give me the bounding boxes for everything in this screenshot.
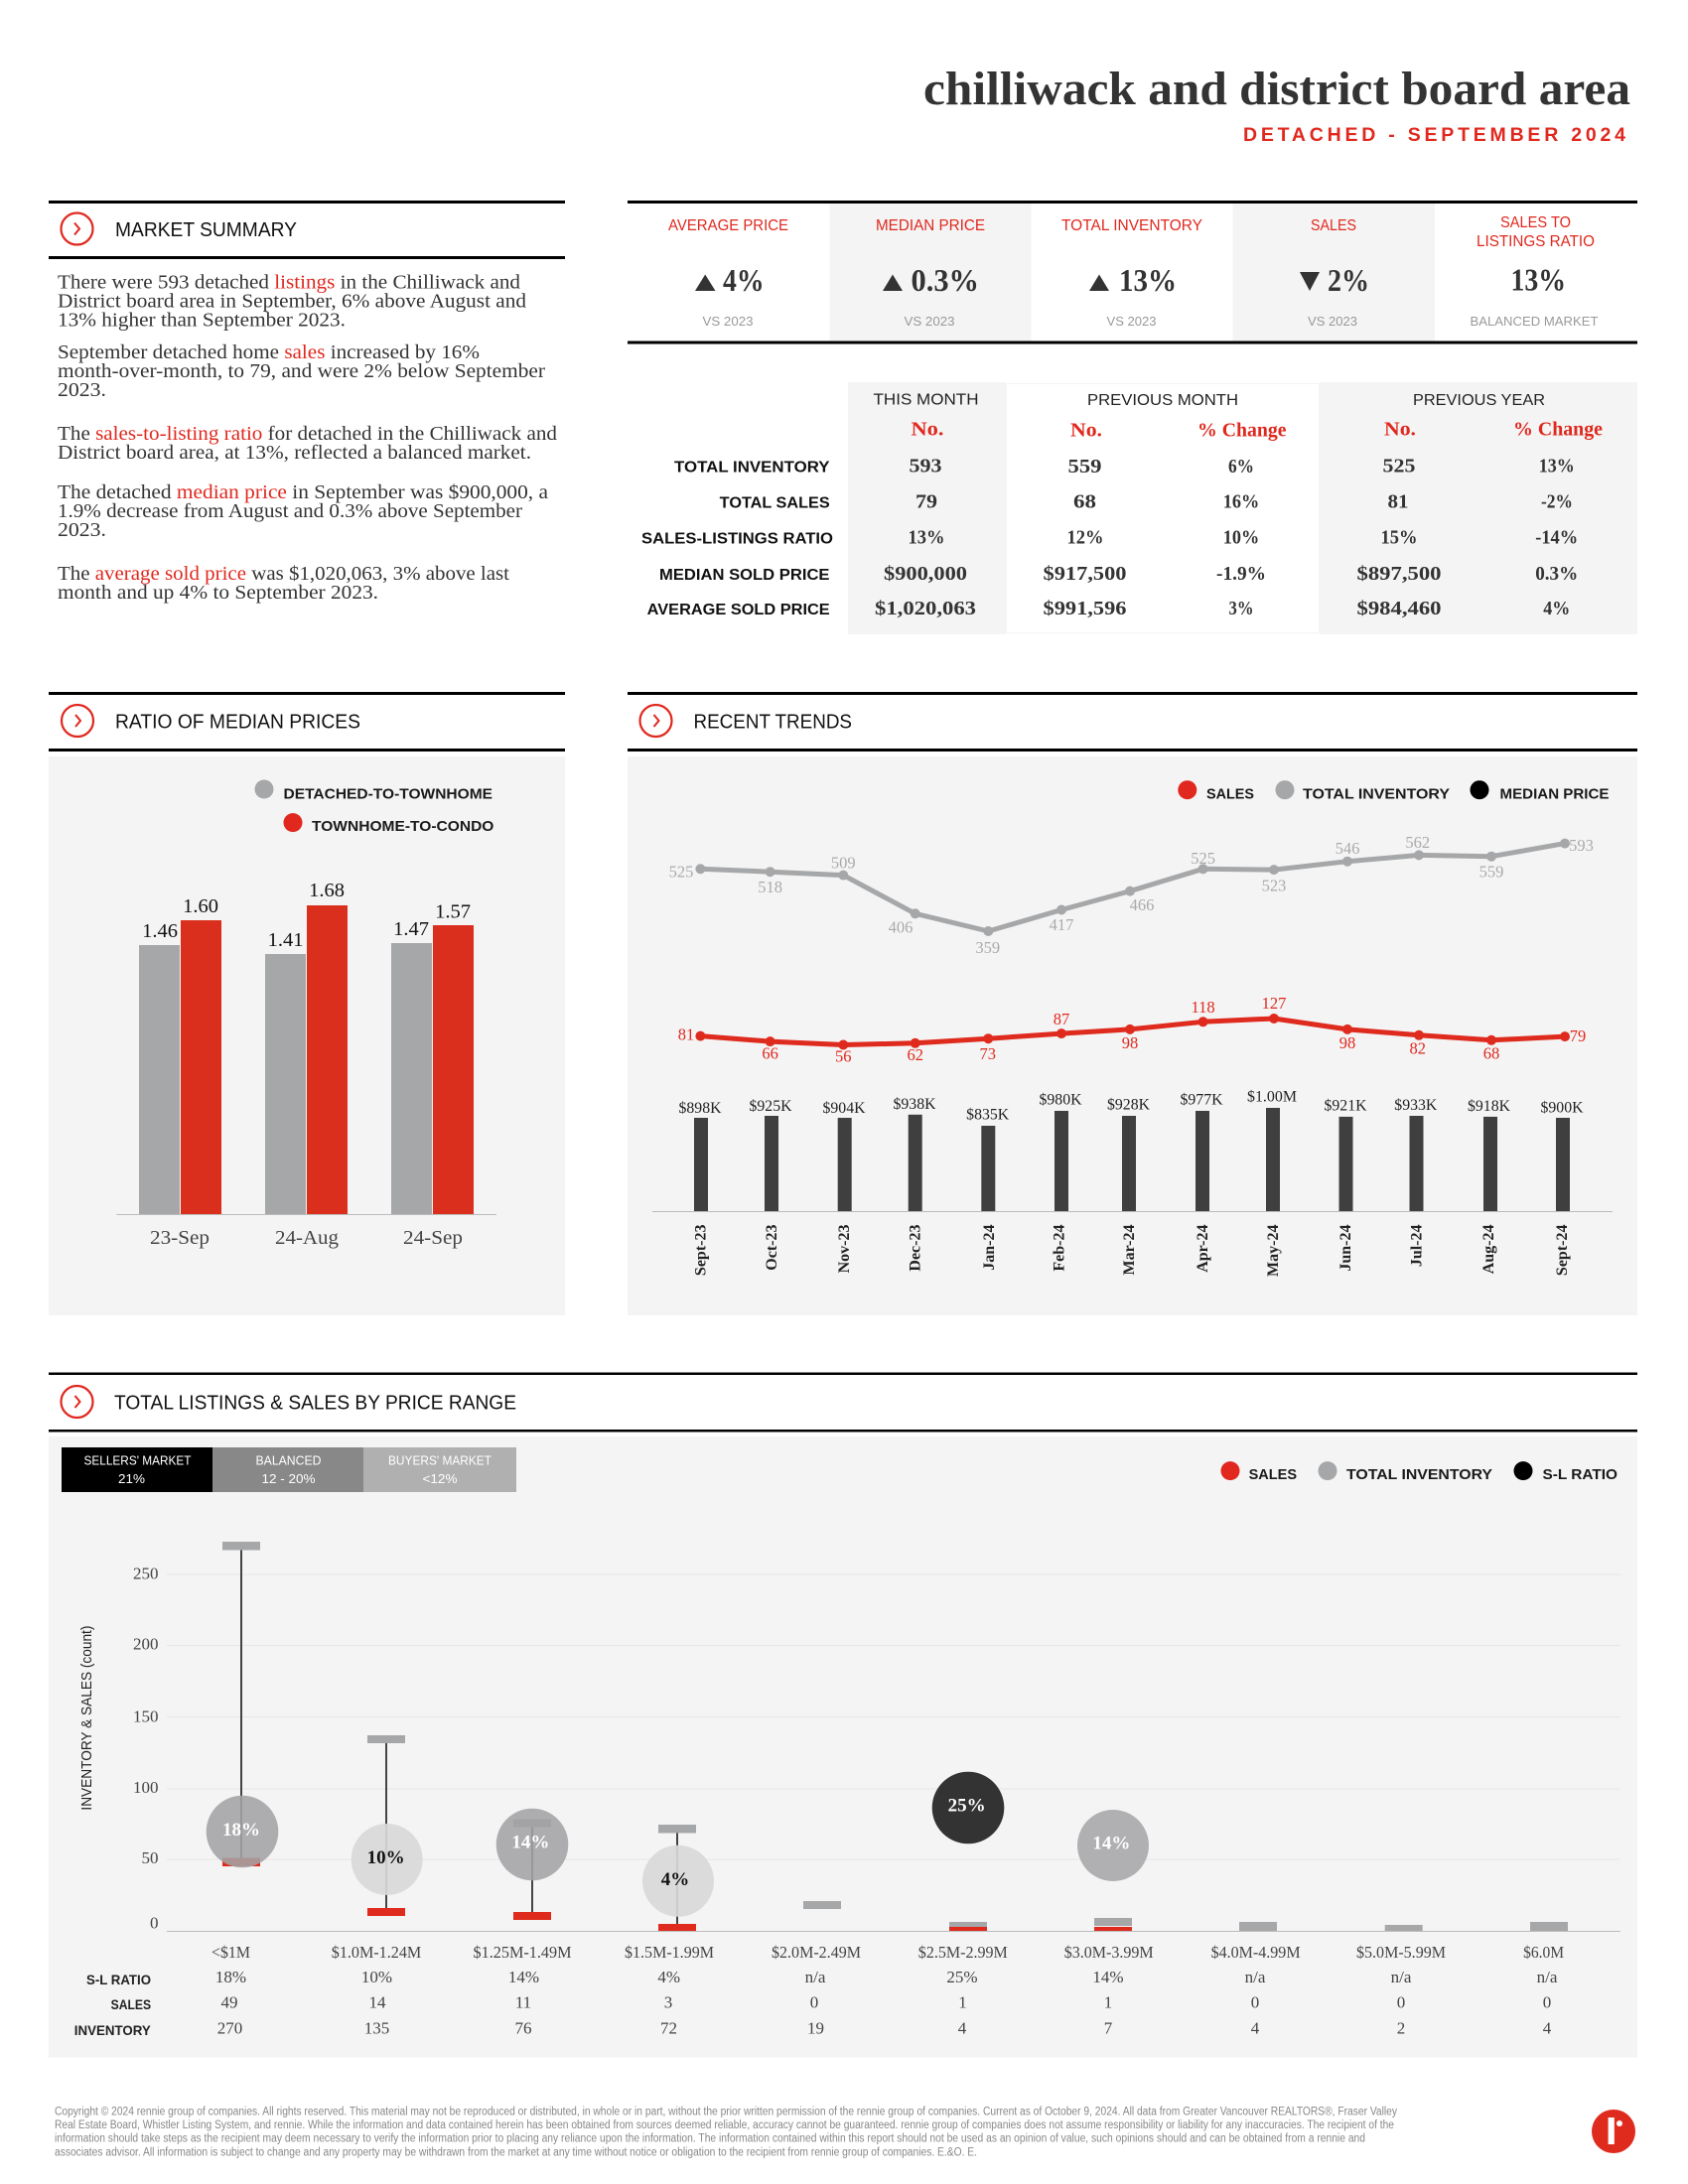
range marker: $3.0M to $3.99M: 14% (1092, 1834, 1130, 1854)
table headers (874, 391, 1603, 441)
panel: ratio of median prices (49, 692, 565, 1315)
table row: total inventory: 6% (1228, 456, 1254, 478)
legend: TOTAL INVENTORY (1346, 1466, 1492, 1483)
panel: key metrics (628, 201, 1637, 343)
bar chart: ratios: 1.41 (268, 929, 303, 951)
table: monthly comparison (641, 382, 1637, 634)
metric: sales: VS 2023 (1308, 314, 1357, 329)
bar chart: median price: $918K (1468, 1098, 1511, 1115)
bar chart: median price: $938K (894, 1096, 936, 1113)
row: inventory: 4 (1251, 2019, 1260, 2038)
line chart: total inventory: 559 (1479, 863, 1503, 882)
table row: sales-listings ratio: 12% (1066, 527, 1104, 549)
row: inventory: 4 (958, 2019, 967, 2038)
table headers: % Change (1513, 419, 1603, 441)
data table: price range values: $1.25M-1.49M (473, 1943, 572, 1962)
range marker: $1.25M to $1.49M (496, 1809, 568, 1920)
panel: total listings and sales by price range (49, 1372, 1637, 2057)
text block: average price paragraph: month and up 4% to September 2023. (58, 582, 378, 604)
table row: average sold price: $1,020,063 (875, 598, 976, 619)
bar chart: ratios: 1.47 (393, 918, 429, 940)
table headers: No. (912, 419, 943, 441)
row: inventory: 4 (1543, 2019, 1552, 2038)
bar chart: median price: $835K (966, 1106, 1010, 1123)
line chart: total inventory: 562 (1405, 833, 1430, 852)
table row: average sold price: $991,596 (1043, 598, 1126, 619)
heading: recent trends: RECENT TRENDS (693, 711, 852, 733)
line chart: sales: 87 (1054, 1010, 1069, 1028)
data table: price range values (74, 1943, 1564, 2038)
legend (254, 780, 494, 835)
row: inventory: INVENTORY (74, 2022, 151, 2038)
table row: average sold price (647, 598, 1570, 619)
range marker: $2.5M to $2.99M (932, 1772, 1004, 1931)
bar chart: median price: $980K (1039, 1092, 1082, 1109)
heading: total listings and sales: TOTAL LISTINGS & SALES BY PRICE RANGE (114, 1393, 516, 1415)
table row: total sales: 79 (915, 490, 937, 512)
line chart: sales: 68 (1483, 1043, 1499, 1062)
bar chart: median price: May-24 (1265, 1225, 1282, 1277)
line chart: total inventory: 359 (975, 938, 1000, 957)
line chart: total inventory: 406 (889, 918, 913, 937)
row: sales: 0 (810, 1992, 818, 2011)
bar chart: ratios: 1.60 (183, 895, 218, 917)
bar chart: ratios: 24-Sep (403, 1227, 463, 1249)
table headers: PREVIOUS YEAR (1413, 392, 1545, 409)
row: s-l ratio: 10% (361, 1968, 392, 1986)
row: s-l ratio: n/a (1391, 1968, 1412, 1986)
row: inventory: 270 (217, 2019, 242, 2038)
table row: average sold price: 4% (1543, 598, 1570, 619)
bar chart: median price: $898K (679, 1100, 722, 1117)
table row: sales-listings ratio: 10% (1223, 527, 1259, 549)
text block: listings paragraph (58, 271, 526, 331)
metric: average price: 4% (723, 262, 765, 298)
line chart: total inventory: 525 (669, 862, 693, 881)
range marker: $2.5M to $2.99M: 25% (948, 1795, 986, 1817)
bar chart: median price: $900K (1541, 1100, 1584, 1117)
legend: SALES (1249, 1466, 1297, 1483)
line chart: sales: 118 (1192, 998, 1215, 1017)
range marker: $1.0M to $1.24M (352, 1735, 423, 1916)
range marker: $6.0M plus (1530, 1922, 1568, 1931)
line chart: total inventory: 509 (831, 853, 856, 872)
icon: rennie logo (1592, 2110, 1635, 2153)
bar chart: median price: Feb-24 (1051, 1225, 1068, 1272)
table row: total sales: 16% (1223, 490, 1259, 512)
table row: total sales: 68 (1073, 490, 1096, 512)
line chart: sales: 66 (762, 1043, 778, 1062)
bar chart: median price: Mar-24 (1121, 1225, 1138, 1275)
table row: total inventory: 525 (1382, 456, 1416, 478)
legend: TOTAL INVENTORY (1303, 786, 1450, 803)
table row: sales-listings ratio: 13% (908, 527, 945, 549)
metric: median price: 0.3% (912, 262, 979, 298)
data table: price range values: $1.5M-1.99M (625, 1943, 714, 1962)
line chart: sales: 56 (835, 1046, 852, 1065)
market key boxes: BALANCED (256, 1453, 322, 1468)
data table: price range values: $2.5M-2.99M (918, 1943, 1008, 1962)
legend: SALES (1206, 786, 1254, 803)
table row: sales-listings ratio: -14% (1535, 527, 1578, 549)
table row: total sales (720, 490, 1573, 512)
legend: S-L RATIO (1543, 1466, 1618, 1483)
table row: sales-listings ratio (641, 527, 1578, 549)
line chart: sales: 73 (979, 1044, 996, 1063)
legend (1221, 1461, 1618, 1483)
table row: total inventory: 559 (1068, 456, 1102, 478)
row: s-l ratio: n/a (805, 1968, 826, 1986)
line chart: total inventory: 417 (1050, 915, 1073, 934)
text block: median price paragraph (58, 481, 548, 541)
table row: total inventory: TOTAL INVENTORY (674, 460, 830, 477)
row: sales: 0 (1251, 1992, 1259, 2011)
bar chart: median price: $1.00M (1247, 1089, 1297, 1106)
row: s-l ratio: 14% (1092, 1968, 1124, 1986)
table row: median sold price: $900,000 (884, 563, 967, 585)
bar chart: median price: Nov-23 (836, 1225, 853, 1273)
table row: median sold price: $897,500 (1356, 563, 1442, 585)
row: sales: 1 (1104, 1992, 1112, 2011)
bar chart: median price: Apr-24 (1195, 1225, 1211, 1273)
metric: average price: VS 2023 (703, 314, 753, 329)
bar chart: median price: $921K (1325, 1098, 1367, 1115)
text block: sales paragraph: September detached home sales increased by 16% (58, 341, 480, 363)
row: s-l ratio: 14% (508, 1968, 539, 1986)
line chart: total inventory: 546 (1336, 839, 1359, 858)
line chart: sales: 98 (1122, 1033, 1138, 1052)
text block: sales paragraph (58, 341, 545, 401)
chart: inventory and sales by price range: 0 (150, 1914, 159, 1932)
metric: total inventory: TOTAL INVENTORY (1061, 217, 1202, 234)
row: sales: 49 (220, 1992, 238, 2011)
text block: average price paragraph (58, 563, 509, 604)
line chart: sales: 79 (1570, 1026, 1586, 1045)
footer disclaimer: Real Estate Board, Whistler Listing System, and rennie. While the information and data contained herein has been obtained from sources deemed reliable, accuracy cannot be guaranteed. rennie group of companies does not assume responsibility or liability for any inaccuracies. The recipient of the (55, 2119, 1394, 2131)
bar chart: median price: Jun-24 (1337, 1225, 1354, 1272)
bar chart: ratios: 1.46 (142, 920, 178, 942)
bar chart: ratios: 23-Sep (150, 1227, 210, 1249)
metric: sales: SALES (1311, 217, 1356, 234)
text block: listings paragraph: 13% higher than September 2023. (58, 309, 346, 331)
range marker: $1.25M to $1.49M: 14% (511, 1833, 549, 1853)
line chart: sales: 98 (1339, 1033, 1355, 1052)
market key boxes: SELLERS' MARKET (83, 1453, 192, 1468)
row: inventory: 72 (660, 2019, 677, 2038)
icon: section chevron (62, 212, 93, 244)
metric: total inventory: 13% (1119, 262, 1177, 298)
icon: section chevron (62, 705, 93, 737)
data table: price range values: $6.0M (1523, 1943, 1564, 1962)
table row: total inventory: 593 (910, 456, 941, 478)
text block: sales paragraph: 2023. (58, 379, 106, 401)
table row: average sold price: AVERAGE SOLD PRICE (647, 602, 830, 618)
row: s-l ratio: 25% (946, 1968, 978, 1986)
panel: recent trends (628, 692, 1637, 1315)
row: s-l ratio: n/a (1537, 1968, 1558, 1986)
row: s-l ratio: 18% (215, 1968, 246, 1986)
data table: price range values: <$1M (211, 1943, 250, 1962)
table row: total sales: TOTAL SALES (720, 494, 830, 511)
table row: median sold price: -1.9% (1216, 563, 1266, 585)
table row: average sold price: 3% (1229, 598, 1253, 619)
metric: sales to listings ratio: SALES TO (1500, 214, 1571, 231)
line chart: total inventory: 466 (1130, 895, 1154, 914)
table row: total sales: -2% (1541, 490, 1573, 512)
bar chart: ratios: 1.57 (435, 901, 471, 923)
data table: price range values: $5.0M-5.99M (1356, 1943, 1446, 1962)
chart: inventory and sales by price range: 100 (133, 1778, 159, 1797)
metric: median price: VS 2023 (904, 314, 955, 329)
row: inventory: 19 (807, 2019, 824, 2038)
row: inventory: 76 (514, 2019, 532, 2038)
table headers: No. (1070, 419, 1102, 441)
range marker: under $1M (207, 1542, 278, 1867)
line chart: sales: 81 (678, 1024, 694, 1043)
row: sales (111, 1992, 1551, 2012)
metric: sales to listings ratio: 13% (1511, 262, 1566, 298)
heading: market summary: MARKET SUMMARY (115, 219, 297, 241)
table row: sales-listings ratio: SALES-LISTINGS RATIO (641, 531, 833, 548)
row: s-l ratio: S-L RATIO (86, 1972, 151, 1987)
bar chart: median price: Jul-24 (1408, 1225, 1426, 1267)
chart: inventory and sales by price range: INVENTORY & SALES (count) (79, 1626, 95, 1811)
chart: inventory and sales by price range (79, 1542, 1620, 1932)
text block: sales paragraph: month-over-month, to 79, and were 2% below September (58, 360, 545, 382)
heading: ratio of median prices: RATIO OF MEDIAN PRICES (115, 711, 360, 733)
data table: price range values: $2.0M-2.49M (772, 1943, 861, 1962)
bar chart: median price: Jan-24 (981, 1225, 998, 1271)
metric: average price: AVERAGE PRICE (668, 217, 788, 234)
row: sales: 11 (515, 1992, 531, 2011)
text block: listings paragraph: District board area in September, 6% above August and (58, 290, 526, 312)
bar chart: median price (652, 1089, 1613, 1277)
table headers: THIS MONTH (874, 391, 979, 408)
chart: inventory and sales by price range: 250 (133, 1564, 159, 1582)
row: sales: 1 (958, 1992, 967, 2011)
legend: MEDIAN PRICE (1499, 786, 1609, 803)
bar chart: median price: Dec-23 (908, 1225, 923, 1272)
chart: inventory and sales by price range: 200 (133, 1635, 159, 1654)
row: inventory (74, 2019, 1552, 2038)
chart: inventory and sales by price range: 50 (141, 1848, 159, 1867)
title: chilliwack and district board area (923, 63, 1630, 115)
metric: sales to listings ratio: BALANCED MARKET (1470, 314, 1599, 329)
table headers: No. (1384, 419, 1416, 441)
bar chart: ratios (117, 880, 496, 1249)
row: sales: 14 (369, 1992, 386, 2011)
table row: median sold price: MEDIAN SOLD PRICE (659, 567, 830, 584)
line chart: total inventory: 523 (1262, 877, 1286, 895)
metric: median price (876, 217, 985, 329)
footer disclaimer: associates advisor. All information is subject to change and any property may be withdrawn from the market at any time without notice or obligation to the recipient from rennie group of companies. E.&O. E. (55, 2147, 977, 2159)
table row: total inventory: 13% (1539, 456, 1575, 478)
chart: inventory and sales by price range: 150 (133, 1707, 159, 1725)
table headers: % Change (1197, 419, 1287, 441)
market key boxes: 21% (118, 1471, 145, 1486)
range marker: under $1M: 18% (222, 1820, 260, 1841)
subtitle: DETACHED - SEPTEMBER 2024 (1243, 124, 1625, 146)
icon: section chevron (639, 705, 671, 737)
bar chart: ratios: 24-Aug (275, 1227, 339, 1249)
bar chart: median price: $925K (749, 1098, 792, 1115)
text block: median price paragraph: 2023. (58, 519, 106, 541)
range marker: $3.0M to $3.99M (1077, 1810, 1149, 1931)
bar chart: median price: $977K (1180, 1092, 1223, 1109)
bar chart: ratios: 1.68 (309, 880, 345, 901)
legend: DETACHED-TO-TOWNHOME (284, 786, 492, 803)
table row: median sold price: $917,500 (1043, 563, 1126, 585)
metric: average price (668, 217, 788, 329)
metric: sales to listings ratio (1470, 214, 1599, 329)
market key boxes: BUYERS' MARKET (388, 1453, 492, 1468)
line chart: total inventory: 518 (758, 878, 782, 896)
range marker: $1.5M to $1.99M: 4% (661, 1869, 689, 1890)
text block: ratio paragraph (58, 423, 557, 464)
range marker: $1.5M to $1.99M (642, 1825, 714, 1931)
row: sales: SALES (111, 1996, 151, 2012)
metric: total inventory: VS 2023 (1106, 314, 1156, 329)
row: inventory: 135 (364, 2019, 389, 2038)
data table: price range values: $1.0M-1.24M (332, 1943, 422, 1962)
line chart: total inventory (669, 833, 1594, 957)
line chart: total inventory: 525 (1191, 849, 1215, 868)
panel: market summary (49, 201, 565, 604)
table row: median sold price (659, 563, 1578, 585)
table row: median sold price: 0.3% (1535, 563, 1578, 585)
legend: TOWNHOME-TO-CONDO (312, 818, 494, 835)
range marker: $5.0M to $5.99M (1385, 1925, 1423, 1931)
line chart: total inventory: 593 (1569, 836, 1594, 855)
line chart: sales: 82 (1410, 1039, 1426, 1058)
metric: sales: 2% (1328, 262, 1369, 298)
bar chart: median price: $933K (1394, 1097, 1438, 1114)
line chart: sales: 62 (907, 1045, 923, 1064)
metric: sales (1300, 217, 1369, 329)
data table: price range values: $4.0M-4.99M (1211, 1943, 1301, 1962)
text block: median price paragraph: 1.9% decrease from August and 0.3% above September (58, 500, 522, 522)
footer disclaimer: Copyright © 2024 rennie group of companies. All rights reserved. This material may not be reproduced or distributed, in whole or in part, without the prior written permission of the rennie group of companies. Current as of October 9, 2024. All data from Greater Vancouver REALTORS®, Fraser Valley (55, 2107, 1397, 2118)
table row: sales-listings ratio: 15% (1380, 527, 1418, 549)
range marker: $1.0M to $1.24M: 10% (367, 1847, 405, 1868)
metric: sales to listings ratio: LISTINGS RATIO (1477, 233, 1595, 250)
market key boxes: 12 - 20% (262, 1471, 316, 1486)
bar chart: median price: Sept-24 (1554, 1225, 1571, 1276)
row: s-l ratio: n/a (1245, 1968, 1266, 1986)
market key boxes (62, 1447, 516, 1492)
text block: ratio paragraph: The sales-to-listing ratio for detached in the Chilliwack and (58, 423, 557, 445)
text block: average price paragraph: The average sold price was $1,020,063, 3% above last (58, 563, 509, 585)
bar chart: median price: Oct-23 (764, 1225, 780, 1271)
data table: price range values: $3.0M-3.99M (1064, 1943, 1154, 1962)
table headers: PREVIOUS MONTH (1087, 392, 1238, 409)
line chart: sales: 127 (1262, 994, 1286, 1013)
row: sales: 3 (664, 1992, 672, 2011)
range marker: $2.0M to $2.49M (803, 1901, 841, 1909)
row: sales: 0 (1397, 1992, 1405, 2011)
table row: average sold price: $984,460 (1356, 598, 1442, 619)
row: inventory: 2 (1397, 2019, 1405, 2038)
footer disclaimer: information should take steps as the recipient may deem necessary to verify the information prior to placing any reliance upon the information. The information contained within this report should not be used as an opinion of value, such opinions should and can be obtained from a rennie and (55, 2133, 1365, 2145)
legend (1178, 780, 1609, 803)
row: s-l ratio (86, 1968, 1558, 1987)
line chart: sales (678, 994, 1586, 1065)
table row: total inventory (674, 456, 1575, 478)
icon: section chevron (62, 1386, 93, 1418)
row: inventory: 7 (1104, 2019, 1113, 2038)
text block: median price paragraph: The detached median price in September was $900,000, a (58, 481, 548, 503)
metric: total inventory (1061, 217, 1202, 329)
bar chart: median price: $928K (1107, 1097, 1151, 1114)
bar chart: median price: Sept-23 (693, 1225, 709, 1276)
metric: median price: MEDIAN PRICE (876, 217, 985, 234)
row: sales: 0 (1543, 1992, 1551, 2011)
range marker: $4.0M to $4.99M (1239, 1922, 1277, 1931)
bar chart: median price: $904K (822, 1100, 866, 1117)
text block: listings paragraph: There were 593 detached listings in the Chilliwack and (58, 271, 520, 293)
table row: total sales: 81 (1388, 490, 1408, 512)
market key boxes: <12% (423, 1471, 458, 1486)
text block: ratio paragraph: District board area, at 13%, reflected a balanced market. (58, 442, 531, 464)
row: s-l ratio: 4% (657, 1968, 680, 1986)
footer disclaimer (55, 2107, 1397, 2159)
bar chart: median price: Aug-24 (1480, 1225, 1497, 1274)
